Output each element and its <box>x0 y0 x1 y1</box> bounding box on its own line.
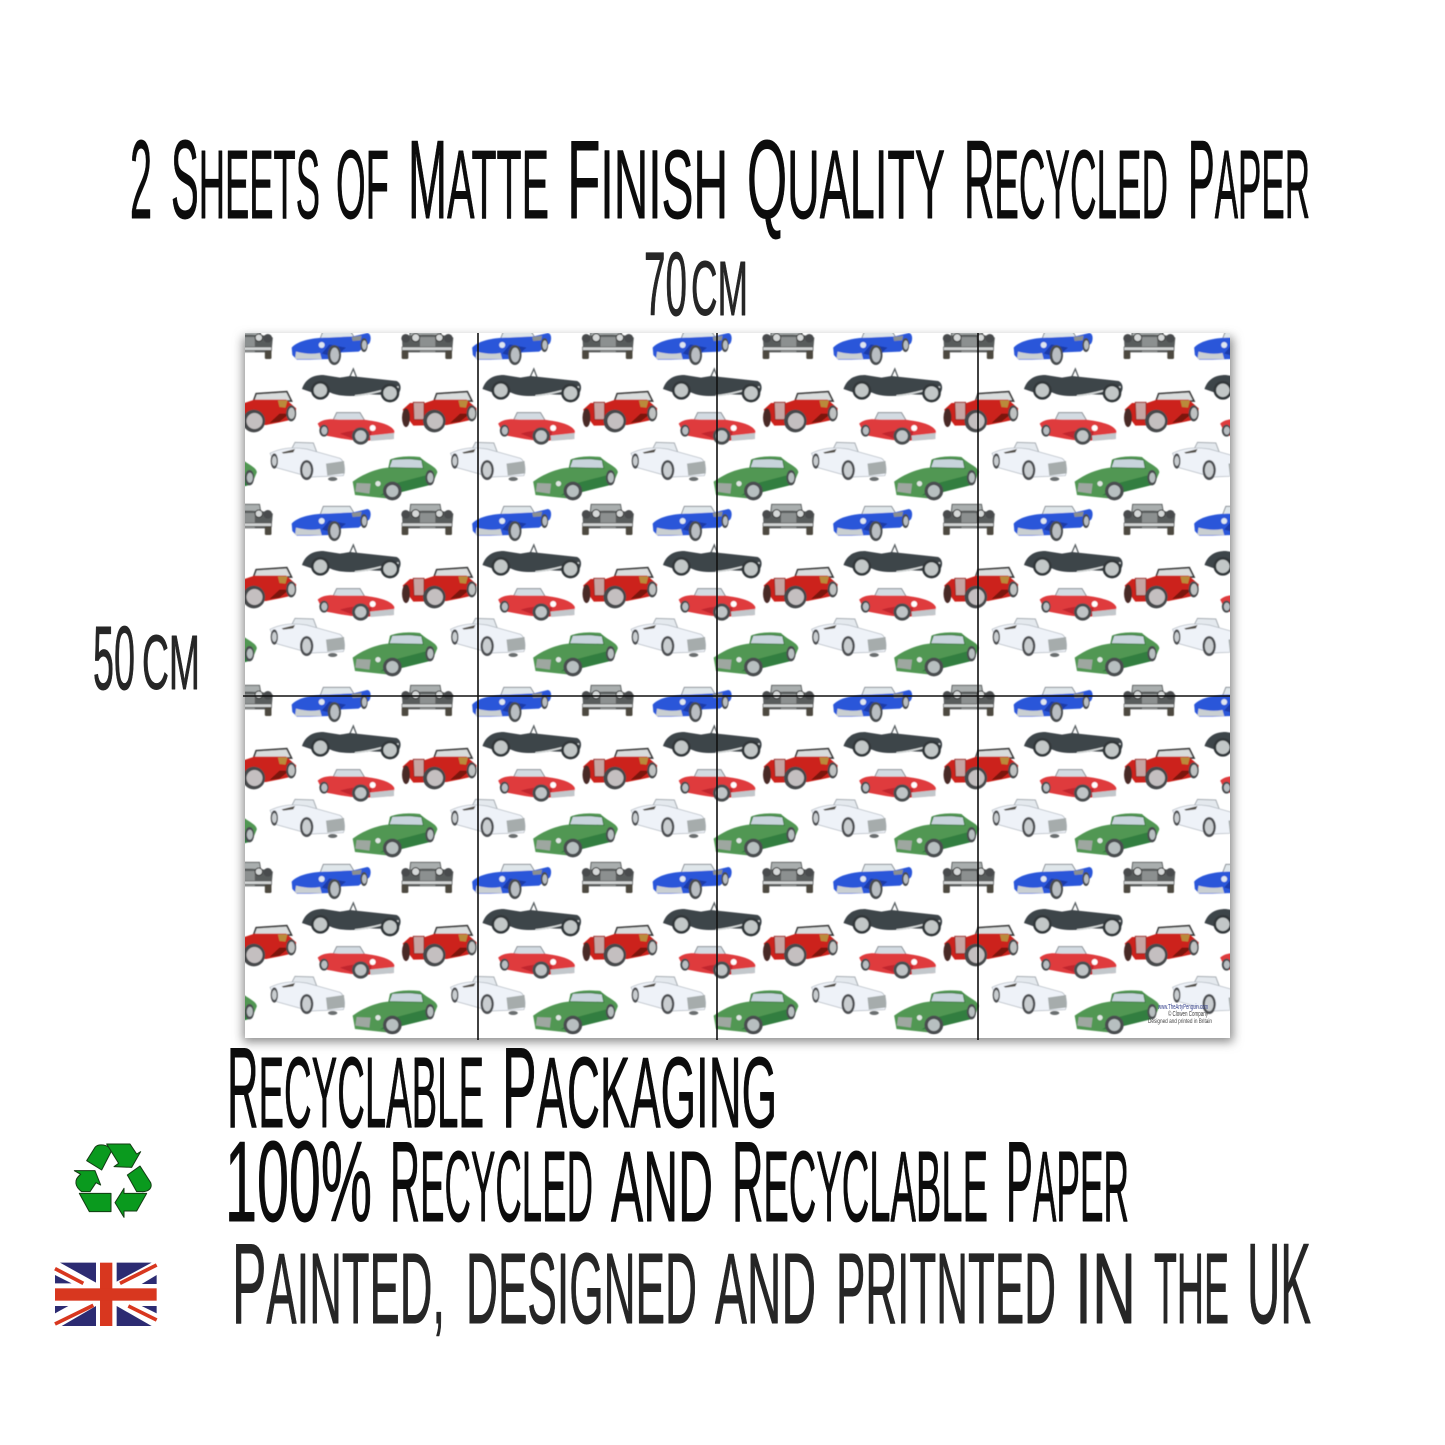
text: painted in the UK <box>232 1221 1311 1348</box>
watermark: © Clowen Company <box>1168 1010 1208 1018</box>
text: CM <box>142 620 200 706</box>
paper sheet with car pattern <box>245 333 1230 1038</box>
text: painted in the UK: PAINTED, <box>232 1221 445 1348</box>
text: UK <box>1247 1221 1311 1348</box>
fold lines <box>243 333 1230 1040</box>
text: recycled paper: 100% <box>225 1119 372 1246</box>
title <box>130 118 1310 242</box>
text: recyclable packaging: RECYCLABLE <box>227 1025 484 1152</box>
text: CM <box>691 246 748 332</box>
title: FINISH <box>567 118 728 242</box>
text: painted in the UK: PRITNTED <box>836 1233 1056 1345</box>
icon: union flag <box>55 1263 157 1326</box>
text: recycled paper: RECYCLABLE <box>732 1119 988 1246</box>
icon: recycling symbol <box>74 1144 151 1217</box>
text: recycled paper: AND <box>611 1131 713 1243</box>
text: recycled paper <box>225 1119 1129 1246</box>
text: painted in the UK: THE <box>1154 1233 1229 1345</box>
title: SHEETS <box>171 118 320 242</box>
watermark: Designed and printed in Britain <box>1148 1018 1212 1025</box>
height label: 50cm: 50 <box>93 609 135 709</box>
text: painted in the UK: AND <box>715 1233 816 1345</box>
title: QUALITY <box>747 118 945 242</box>
title: MATTE <box>408 118 549 242</box>
text: PACKAGING <box>502 1025 777 1152</box>
width label: 70cm: 70 <box>644 235 687 335</box>
watermark <box>1148 1002 1212 1025</box>
title: OF <box>336 130 389 239</box>
watermark: www.TheArtyPenguin.com <box>1157 1002 1208 1011</box>
text: recycled paper: RECYCLED <box>390 1119 593 1246</box>
text: painted in the UK: IN <box>1075 1233 1136 1345</box>
text: PAPER <box>1006 1119 1129 1246</box>
title: RECYCLED <box>964 118 1168 242</box>
title: 2 <box>130 118 152 242</box>
sheet shadow <box>243 337 1233 1042</box>
text: painted in the UK: DESIGNED <box>466 1233 697 1345</box>
